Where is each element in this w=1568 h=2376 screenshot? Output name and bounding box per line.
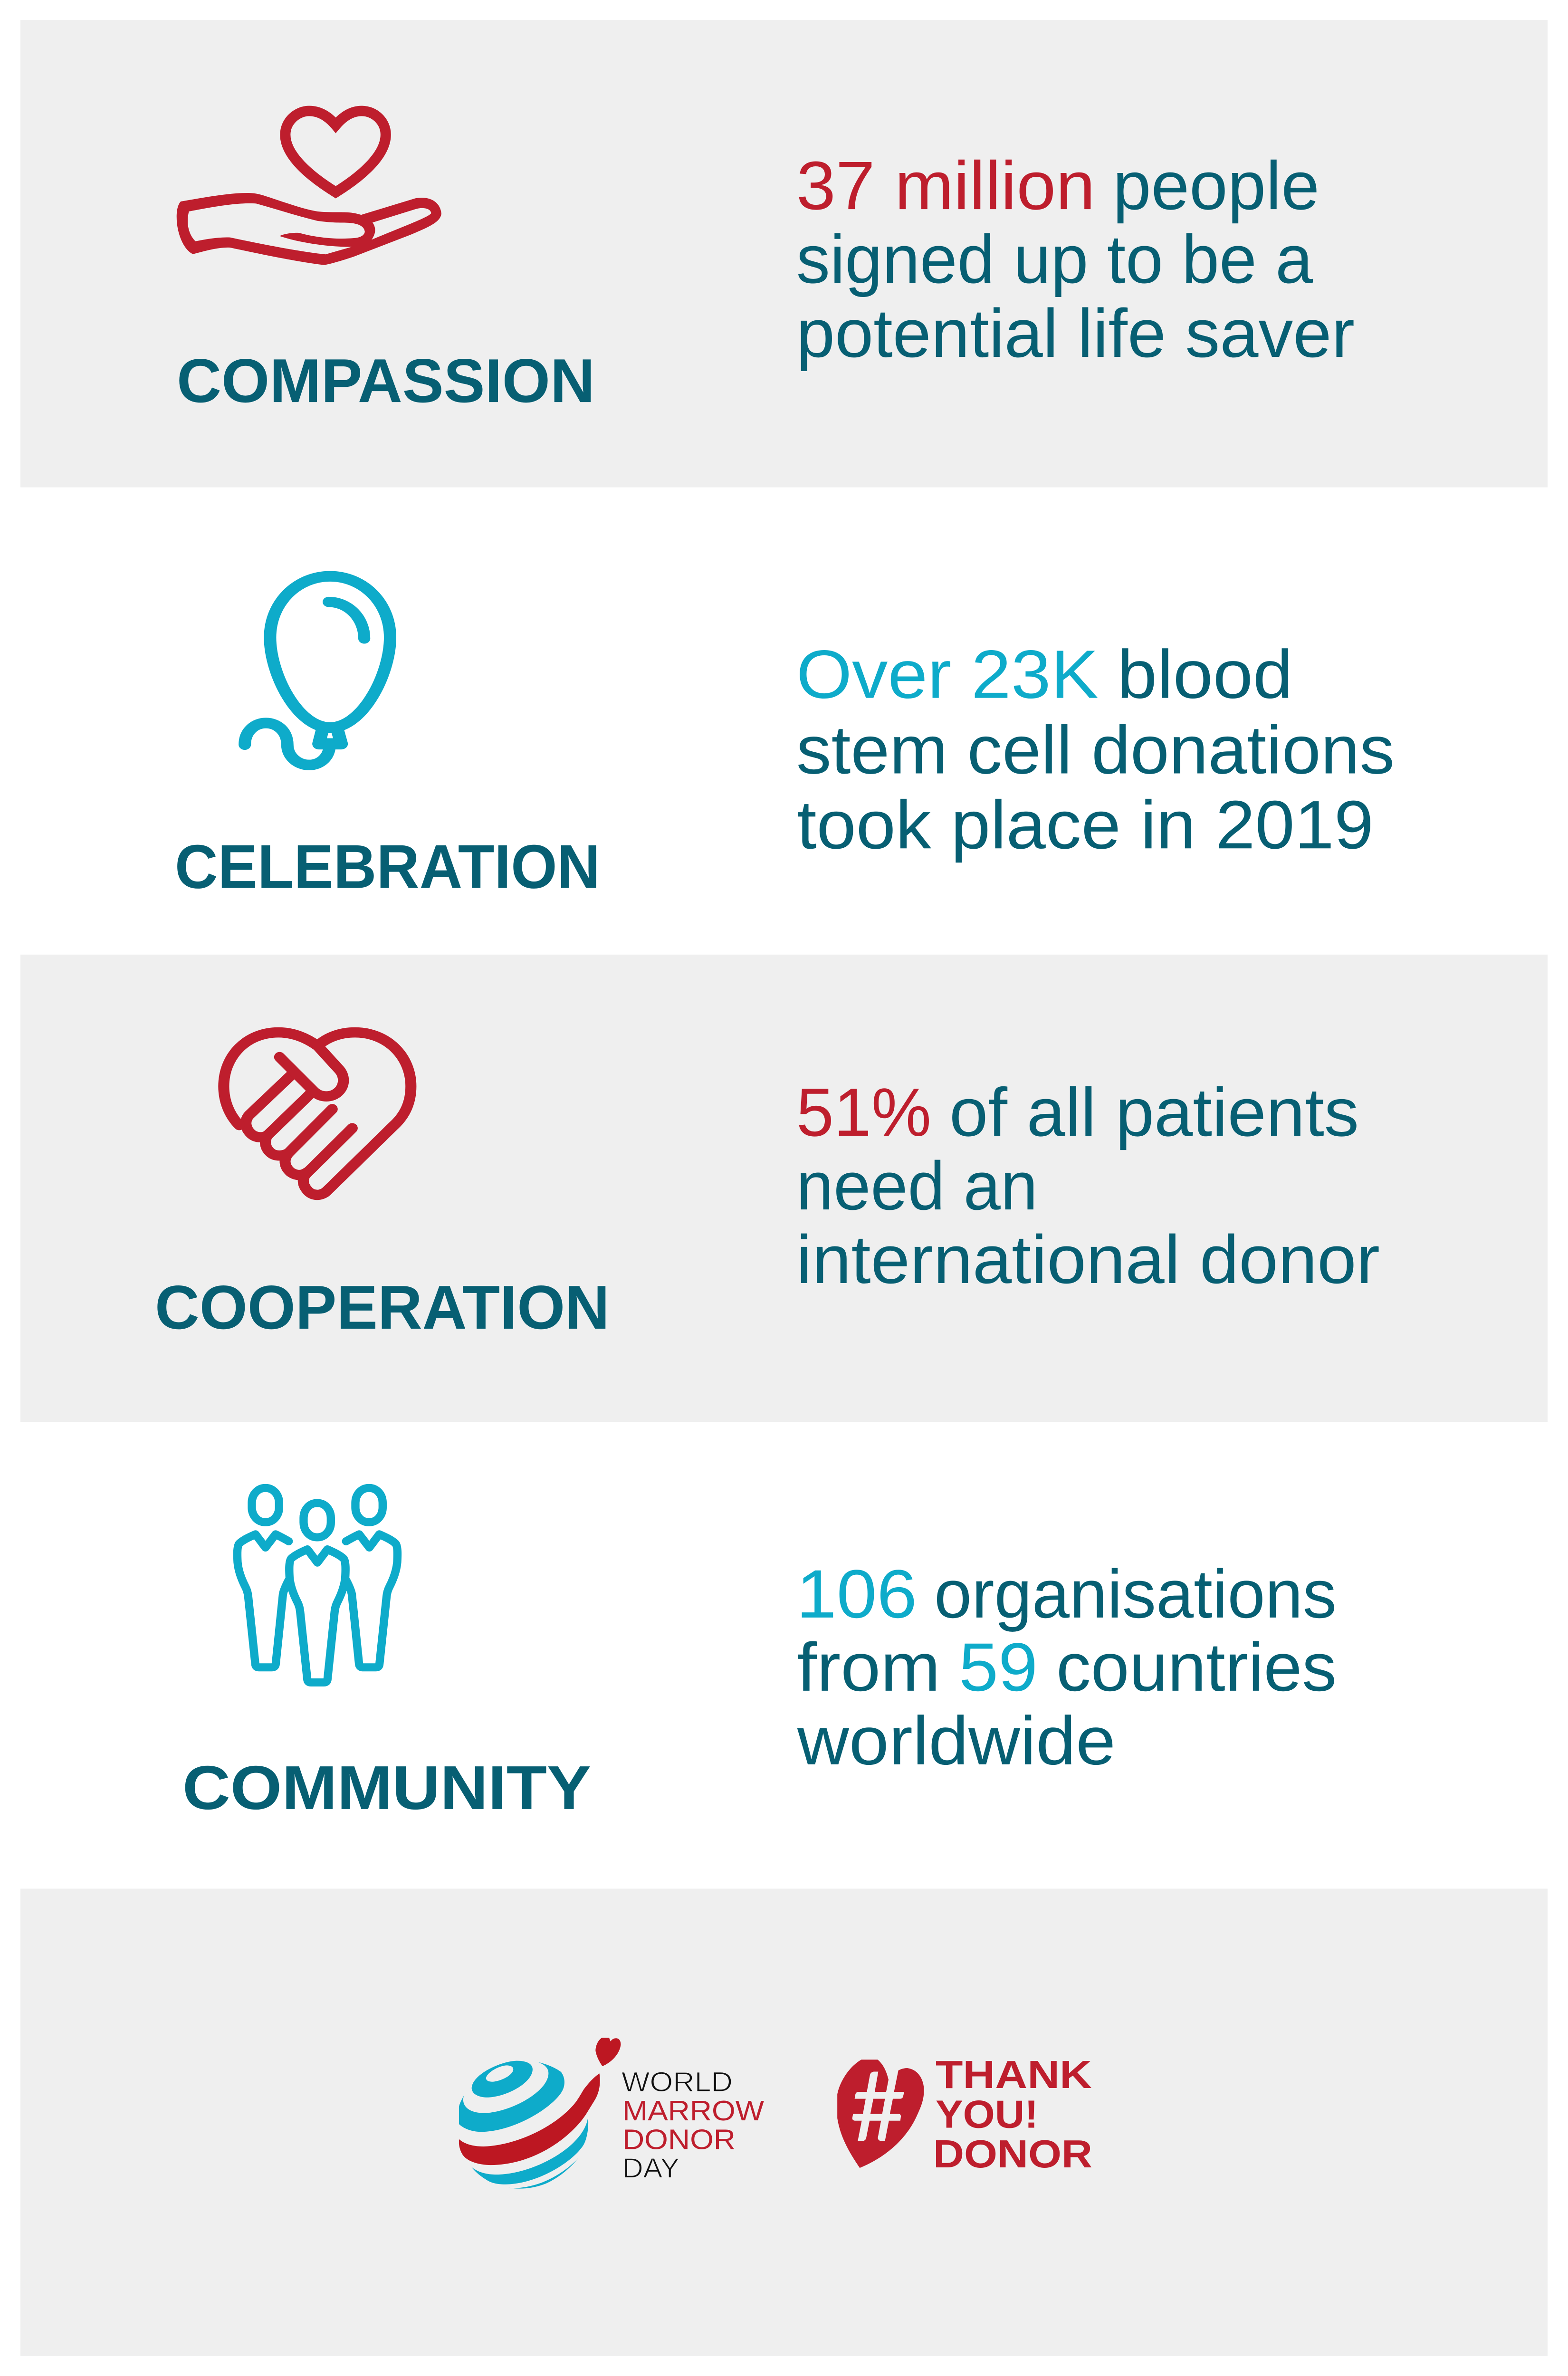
text block: 37 million people signed up to be a potential life saver: potential life saver bbox=[796, 295, 1355, 372]
icon: hashtag heart bbox=[837, 2060, 924, 2168]
panel: compassion bbox=[20, 20, 1548, 487]
icon: balloon bbox=[245, 576, 390, 765]
logo text: DAY bbox=[622, 2152, 679, 2184]
text block: 51% of all patients need an international donor: need an bbox=[796, 1147, 1038, 1224]
text block: 37 million people signed up to be a potential life saver: 37 million bbox=[796, 147, 1095, 224]
logo text bbox=[933, 2053, 1092, 2176]
panel: celebration bbox=[20, 487, 1548, 955]
icon: handshake heart bbox=[224, 1033, 411, 1195]
text block: 37 million people signed up to be a potential life saver: signed up to be a bbox=[796, 220, 1313, 297]
logo text: MARROW bbox=[622, 2094, 764, 2127]
text block: over 23K blood stem cell donations took place in 2019 bbox=[796, 636, 1395, 863]
logo text: YOU! bbox=[936, 2092, 1038, 2136]
text block: 106 organisations from 59 countries worldwide: countries bbox=[1056, 1629, 1337, 1705]
logo text: WORLD bbox=[621, 2066, 733, 2098]
logo: world marrow donor day bbox=[459, 2038, 764, 2189]
text block: 37 million people signed up to be a potential life saver: people bbox=[1113, 147, 1319, 224]
panel: cooperation bbox=[20, 955, 1548, 1422]
heading: cooperation: COOPERATION bbox=[155, 1273, 610, 1342]
logo text: DONOR bbox=[933, 2132, 1092, 2176]
text block: 51% of all patients need an international donor bbox=[796, 1074, 1380, 1298]
heading: compassion: COMPASSION bbox=[177, 346, 595, 415]
text block: over 23K blood stem cell donations took place in 2019: blood bbox=[1117, 636, 1293, 712]
text block: over 23K blood stem cell donations took place in 2019: stem cell donations bbox=[796, 711, 1395, 788]
logo: thank you donor bbox=[837, 2053, 1092, 2176]
text block: 51% of all patients need an international donor: international donor bbox=[796, 1221, 1380, 1298]
text block: 51% of all patients need an international donor: of all patients bbox=[949, 1074, 1359, 1150]
icon: striped globe with heart bbox=[459, 2038, 621, 2189]
text block: over 23K blood stem cell donations took place in 2019: took place in 2019 bbox=[797, 786, 1374, 863]
icon: three people bbox=[237, 1488, 398, 1682]
logo text: THANK bbox=[936, 2053, 1092, 2097]
text block: over 23K blood stem cell donations took place in 2019: Over 23K bbox=[796, 636, 1099, 712]
text block: 106 organisations from 59 countries worldwide: 59 bbox=[959, 1629, 1038, 1705]
panel: logos bbox=[20, 1889, 1548, 2356]
text block: 51% of all patients need an international donor: 51% bbox=[796, 1074, 931, 1150]
text block: 106 organisations from 59 countries worldwide: organisations bbox=[934, 1555, 1337, 1632]
text block: 106 organisations from 59 countries worldwide: from bbox=[797, 1629, 940, 1705]
logo text bbox=[621, 2066, 764, 2184]
icon: hand holding heart bbox=[177, 111, 441, 265]
text block: 106 organisations from 59 countries worldwide: 106 bbox=[796, 1555, 917, 1632]
panel: community bbox=[20, 1422, 1548, 1889]
text block: 106 organisations from 59 countries worldwide bbox=[796, 1555, 1337, 1779]
logo text: DONOR bbox=[622, 2123, 736, 2155]
heading: community: COMMUNITY bbox=[182, 1753, 591, 1822]
heading: celebration: CELEBRATION bbox=[175, 832, 600, 901]
text block: 106 organisations from 59 countries worldwide: worldwide bbox=[797, 1702, 1116, 1779]
text block: 37 million people signed up to be a potential life saver bbox=[796, 147, 1355, 372]
